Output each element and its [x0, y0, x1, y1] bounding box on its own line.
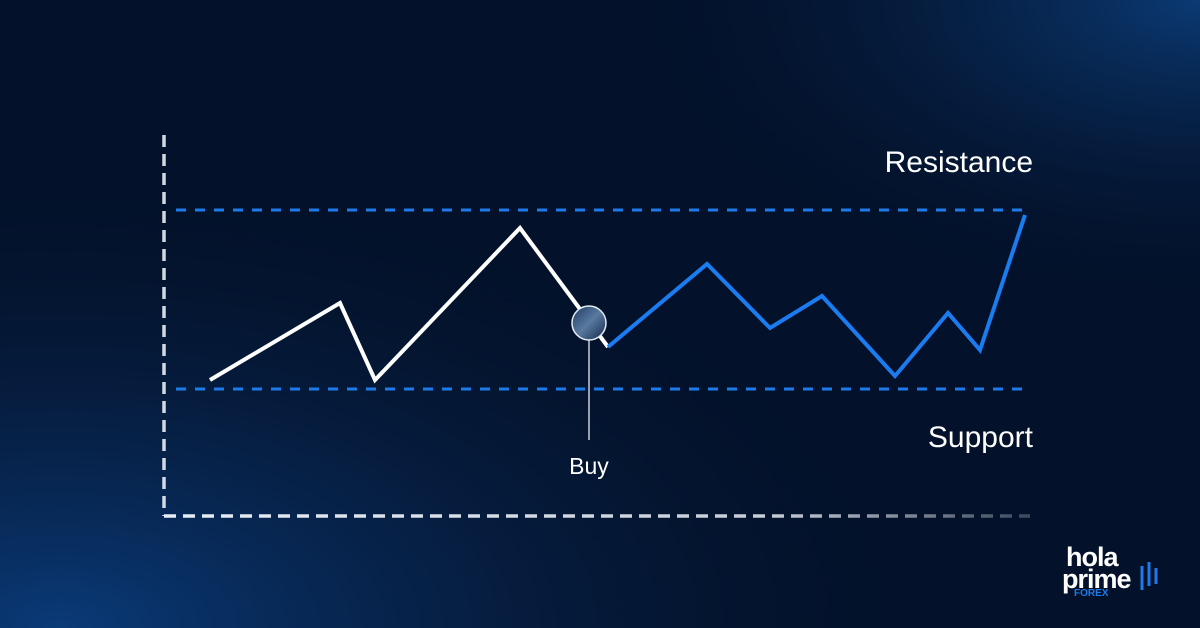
- price line: blue: [608, 215, 1025, 376]
- resistance line: [176, 208, 1025, 212]
- logo: hola prime forex: prime: [1062, 564, 1132, 594]
- buy marker: [569, 306, 609, 479]
- buy marker: Buy: [569, 453, 609, 479]
- logo: hola prime forex: hola: [1066, 542, 1119, 572]
- support line: [176, 388, 1025, 390]
- price line: white: [210, 228, 608, 380]
- axes: [164, 135, 1030, 516]
- label: Resistance: Resistance: [885, 146, 1033, 179]
- label: Support: Support: [928, 421, 1034, 454]
- logo: hola prime forex: FOREX: [1074, 588, 1109, 599]
- logo: hola prime forex: [1062, 542, 1156, 599]
